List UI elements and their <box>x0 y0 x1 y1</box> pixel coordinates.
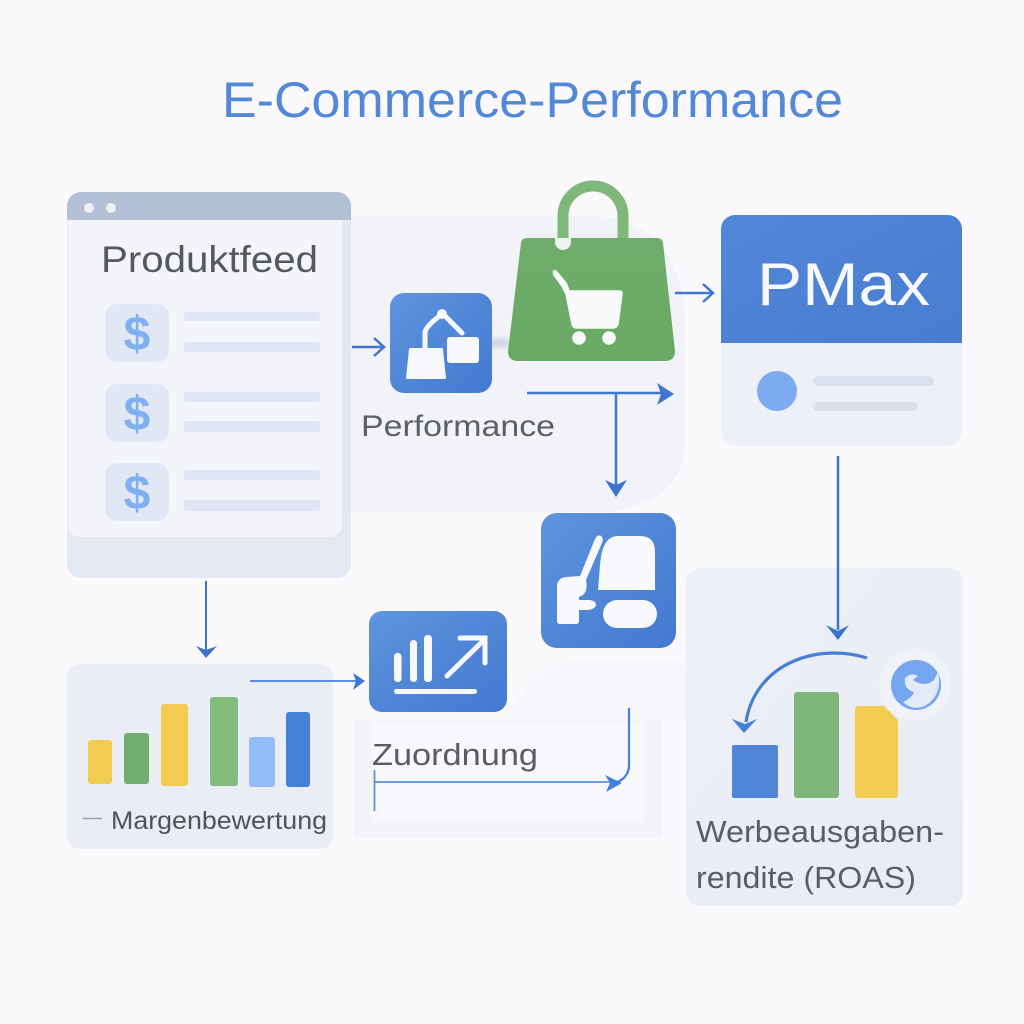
label: Zuordnung: Zuordnung <box>372 737 538 772</box>
label: ROAS: rendite (ROAS) <box>696 860 916 895</box>
panel: PMax <box>721 215 962 446</box>
label: ROAS: Werbeausgaben- <box>696 814 944 849</box>
window dots <box>84 203 116 213</box>
panel: Zuordnung <box>353 708 663 838</box>
badge <box>879 649 951 721</box>
arrow: horizontal to right <box>527 383 674 405</box>
panel: Margenbewertung <box>67 664 333 849</box>
panel: Produktfeed <box>67 192 351 578</box>
arrow: downward to tool icon <box>605 393 627 497</box>
heading: PMax: PMax <box>757 251 930 318</box>
row 3: price icon <box>105 463 169 521</box>
icon: tool <box>541 513 676 648</box>
legend dash <box>83 818 102 820</box>
label: Performance: Performance <box>361 410 555 443</box>
window header bar <box>67 192 351 220</box>
bracket arrow <box>374 708 629 811</box>
title: E-Commerce-Performance <box>222 72 843 128</box>
row 1: text lines <box>184 312 320 352</box>
label: Margenbewertung: Margenbewertung <box>111 807 327 835</box>
row 1: price icon <box>105 304 169 362</box>
row 3: price icon: $ <box>124 467 151 520</box>
arrow: Produktfeed to Margenbewertung <box>196 581 217 658</box>
bar chart <box>88 697 310 787</box>
icon: chart with rising arrow <box>369 611 507 712</box>
text lines <box>813 376 934 411</box>
arrow: Margenbewertung to chart icon <box>250 673 365 690</box>
row 2: price icon <box>105 384 169 442</box>
backdrop: central connecting band <box>345 216 685 512</box>
arrow: PMax down to ROAS <box>826 456 849 640</box>
row 2: price icon: $ <box>124 388 151 441</box>
window body <box>68 220 342 537</box>
icon: green shopping bag with cart <box>508 186 675 361</box>
shadow between icon and bag <box>482 339 514 347</box>
backdrop: lower soft band <box>510 658 700 720</box>
icon: performance bags <box>390 293 492 393</box>
row 2: text lines <box>184 392 320 432</box>
avatar dot <box>757 371 797 411</box>
bar chart <box>732 692 898 798</box>
row 1: price icon: $ <box>124 308 151 361</box>
panel: ROAS <box>686 568 963 906</box>
heading: Produktfeed: Produktfeed <box>101 239 318 280</box>
row 3: text lines <box>184 470 320 511</box>
arrow: bag to PMax <box>675 284 713 302</box>
arrow: Produktfeed to Performance <box>352 338 384 356</box>
curved arrow <box>732 653 867 733</box>
cart <box>553 270 622 345</box>
